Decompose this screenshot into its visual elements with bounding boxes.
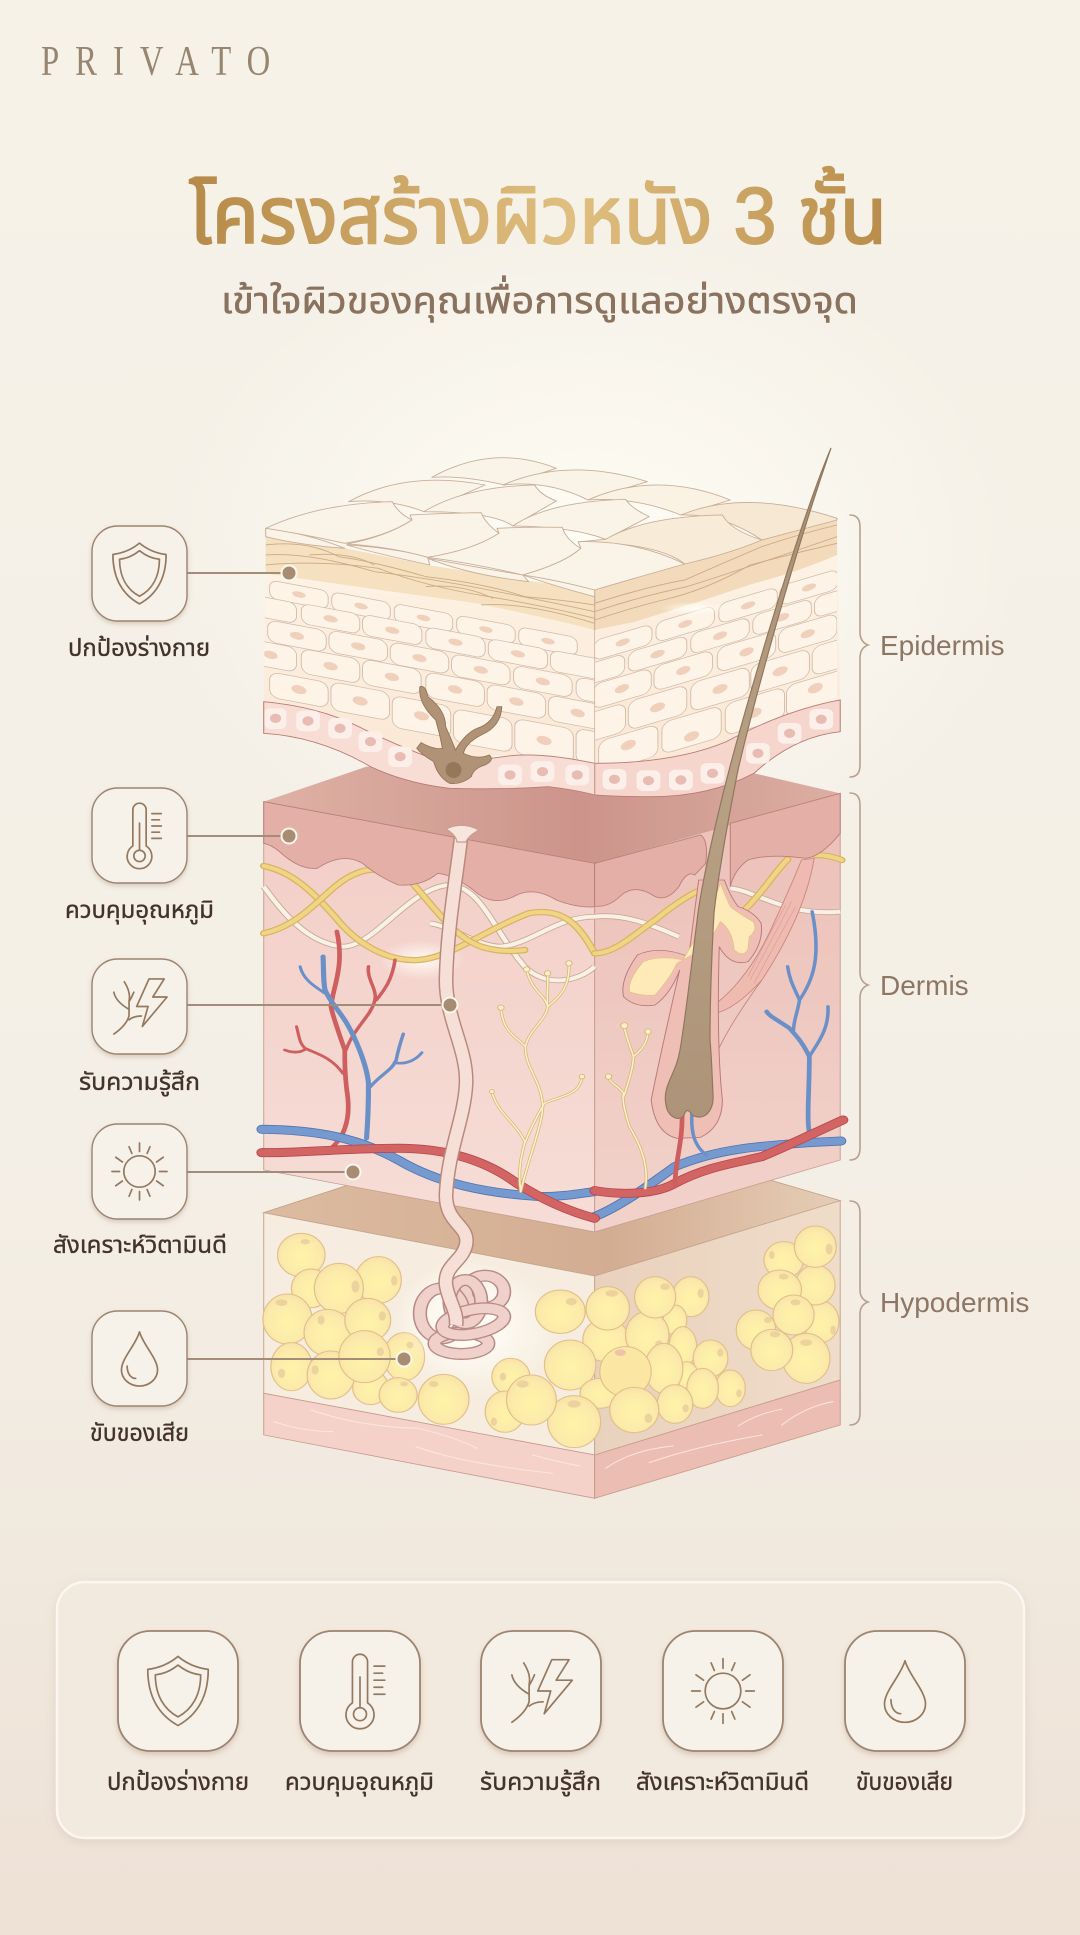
text: temperature: ควบคุมอุณหภูมิ — [65, 897, 214, 925]
hypodermis right face — [595, 1201, 840, 1455]
bracket: hypodermis — [850, 1201, 868, 1425]
stratum corneum band right — [595, 518, 837, 630]
dermis top face — [264, 767, 840, 863]
keratinocyte cells right — [595, 570, 837, 763]
label: Hypodermis: Hypodermis — [880, 1287, 1029, 1318]
main red vessel — [262, 1120, 843, 1218]
text: vitamin D: สังเคราะห์วิตามินดี — [636, 1769, 809, 1796]
icon: sun — [663, 1631, 783, 1751]
text: protect: ปกป้องร่างกาย — [107, 1768, 249, 1796]
text: protect: ปกป้องร่างกาย — [68, 634, 210, 662]
blood vessels left — [285, 932, 422, 1147]
epidermis block — [238, 458, 873, 797]
label: Epidermis: Epidermis — [880, 630, 1004, 661]
title: โครงสร้างผิวหนัง 3 ชั้น — [189, 167, 887, 260]
connector line — [187, 828, 298, 844]
callout: sensation — [79, 959, 458, 1097]
text: excretion: ขับของเสีย — [90, 1420, 189, 1447]
hypodermis block — [263, 1180, 840, 1498]
face corner edge — [594, 590, 596, 795]
text: sensation: รับความรู้สึก — [480, 1769, 601, 1797]
blood vessels right — [767, 912, 828, 1140]
icon: nerve and bolt — [481, 1631, 601, 1751]
band fibres — [274, 1402, 833, 1473]
epidermis left face — [264, 537, 595, 765]
subtitle: เข้าใจผิวของคุณเพื่อการดูแลอย่างตรงจุด — [221, 275, 858, 323]
layer brackets — [850, 515, 868, 1425]
keratinocyte cells left — [264, 581, 594, 762]
icon: nerve and bolt — [92, 959, 187, 1054]
dermis block — [262, 767, 843, 1232]
fat glow — [386, 1260, 568, 1400]
label: Dermis: Dermis — [880, 970, 969, 1001]
coil loops — [420, 1276, 507, 1354]
icon: thermometer — [300, 1631, 420, 1751]
icon: thermometer — [92, 788, 187, 883]
white collagen fibres — [264, 885, 840, 980]
panel background — [57, 1582, 1024, 1838]
panel: summary functions — [57, 1582, 1024, 1838]
connector line — [187, 1164, 362, 1180]
sweat gland coil — [396, 1257, 531, 1377]
highlight under band — [659, 602, 730, 615]
text: sensation: รับความรู้สึก — [79, 1069, 200, 1097]
callout: vitamin D — [53, 1124, 362, 1259]
soft glow on fibres — [378, 940, 465, 980]
callout: excretion — [90, 1311, 412, 1447]
papillary layer behind hair — [730, 793, 840, 887]
icon: water drop — [845, 1631, 965, 1751]
icon: shield — [118, 1631, 238, 1751]
papillary layer left — [264, 802, 595, 907]
sweat duct — [446, 825, 479, 1325]
bracket: dermis — [850, 793, 868, 1160]
icon: water drop — [92, 1311, 187, 1406]
dermis left face — [264, 802, 595, 1232]
follicle sheath and sebaceous glands — [623, 880, 762, 1138]
dermal band left — [264, 1393, 595, 1498]
basal layer — [264, 700, 840, 797]
dermal band right — [595, 1380, 840, 1498]
nerve tree left — [489, 961, 585, 1192]
flat corneocyte flakes — [266, 458, 837, 597]
hair shaft and bulb — [665, 448, 831, 1118]
nerve tree right — [605, 1023, 651, 1188]
hypodermis left face — [264, 1213, 595, 1455]
connector line — [187, 996, 458, 1014]
connector line — [187, 1350, 412, 1368]
connector line — [187, 564, 298, 582]
epidermis right face — [595, 523, 840, 763]
fat cells right cluster — [736, 1226, 839, 1383]
papillary layer right — [595, 835, 706, 906]
logo: PRIVATO: PRIVATO — [41, 38, 270, 85]
dermis right face — [595, 793, 840, 1232]
text: excretion: ขับของเสีย — [856, 1769, 953, 1796]
melanocyte — [417, 686, 502, 784]
main blue vessel — [262, 1129, 841, 1217]
gold elastin fibres — [264, 855, 842, 960]
icon: sun — [92, 1124, 187, 1219]
text: vitamin D: สังเคราะห์วิตามินดี — [53, 1232, 227, 1259]
icon: shield — [92, 526, 187, 621]
stratum corneum lamellae — [266, 525, 837, 630]
fat cells left cluster — [263, 1233, 469, 1424]
background glow — [160, 230, 1020, 890]
bulb vessels — [675, 1113, 707, 1187]
stratum corneum band left — [266, 535, 595, 630]
callout: temperature — [65, 788, 298, 925]
arrector pili muscle — [714, 858, 814, 1053]
fat cells middle cluster — [485, 1277, 745, 1448]
text: temperature: ควบคุมอุณหภูมิ — [285, 1769, 434, 1797]
coil glow — [396, 1257, 531, 1377]
hypodermis top face — [264, 1180, 840, 1276]
callout: protect — [68, 526, 298, 662]
bracket: epidermis — [850, 515, 868, 777]
